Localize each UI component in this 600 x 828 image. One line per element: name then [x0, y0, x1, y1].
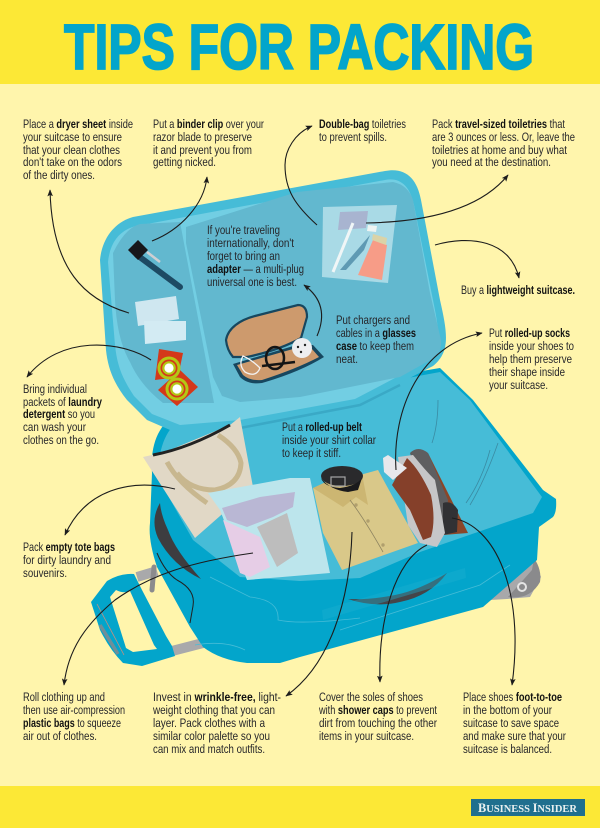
text: dryer sheet tip: your suitcase to ensure — [23, 130, 122, 144]
text: glasses case tip: cables in a glasses — [336, 326, 416, 340]
arrow: lightweight suitcase — [435, 241, 519, 278]
text: foot-to-toe tip: and make sure that your — [463, 729, 566, 743]
text: rolled-up belt tip: Put a rolled-up belt — [282, 420, 362, 434]
text: double-bag tip: Double-bag toiletries — [319, 117, 406, 131]
icon: toiletries in plastic bag — [322, 205, 397, 283]
text: travel-sized toiletries tip: you need at the destination. — [432, 155, 551, 169]
text: laundry detergent tip: packets of laundry — [23, 395, 102, 409]
arrow: dryer sheet — [50, 190, 129, 313]
text: adapter tip: adapter — a multi-plug — [207, 262, 304, 276]
text: adapter tip: internationally, don't — [207, 236, 294, 250]
text: adapter tip — [207, 223, 304, 289]
text: glasses case tip: case to keep them — [336, 339, 414, 353]
arrow: rolled-up socks — [396, 333, 482, 470]
logo: Business Insider: BUSINESS INSIDER — [478, 800, 578, 815]
text: plastic bags tip — [23, 690, 125, 743]
text: plastic bags tip: then use air-compression — [23, 703, 125, 717]
text: wrinkle-free tip: layer. Pack clothes with a — [153, 716, 265, 730]
suitcase luggage handle — [91, 567, 203, 666]
text: dryer sheet tip: Place a dryer sheet inside — [23, 117, 133, 131]
text: binder clip tip — [153, 117, 264, 169]
icon: dryer sheets — [135, 296, 186, 344]
arrow: laundry detergent — [27, 345, 151, 377]
text: foot-to-toe tip: in the bottom of your — [463, 703, 552, 717]
title band — [0, 0, 600, 84]
arrow: foot-to-toe — [452, 518, 515, 685]
text: foot-to-toe tip: suitcase is balanced. — [463, 742, 552, 756]
arrow: binder clip — [152, 177, 207, 241]
arrow: plastic bags — [64, 553, 253, 685]
text: plastic bags tip: plastic bags to squeeze — [23, 716, 121, 730]
text: double-bag tip — [319, 117, 406, 144]
text: tote bags tip — [23, 540, 115, 580]
text: travel-sized toiletries tip: toiletries at home and buy what — [432, 143, 567, 157]
text: wrinkle-free tip: similar color palette so you — [153, 729, 270, 743]
lid left compartment — [113, 222, 214, 403]
icon: glasses case with chargers — [226, 305, 324, 383]
text: binder clip tip: it and prevent you from — [153, 143, 252, 157]
text: dryer sheet tip — [23, 117, 133, 182]
text: foot-to-toe tip — [463, 690, 566, 756]
text: binder clip tip: Put a binder clip over your — [153, 117, 264, 131]
text: rolled-up belt tip: inside your shirt collar — [282, 433, 376, 447]
text: travel-sized toiletries tip: Pack travel-sized toiletries that — [432, 117, 565, 131]
text: tote bags tip: for dirty laundry and — [23, 553, 111, 567]
suitcase lid — [100, 170, 446, 433]
text: shower caps tip: with shower caps to prevent — [318, 703, 437, 717]
text: dryer sheet tip: of the dirty ones. — [23, 168, 95, 182]
text: rolled-up socks tip: inside your shoes to — [489, 339, 574, 353]
text: rolled-up belt tip — [282, 420, 376, 460]
text: laundry detergent tip: detergent so you — [23, 407, 95, 421]
text: shower caps tip: items in your suitcase. — [319, 729, 414, 743]
arrow: tote bags — [65, 485, 175, 535]
text: shower caps tip: Cover the soles of shoes — [319, 690, 423, 704]
text: wrinkle-free tip: can mix and match outfits. — [153, 742, 265, 756]
text: double-bag tip: to prevent spills. — [319, 130, 387, 144]
icon: shoes with shower caps and socks — [383, 449, 468, 547]
icon: empty tote bag — [143, 417, 253, 538]
suitcase interior — [158, 372, 542, 581]
text: laundry detergent tip: can wash your — [23, 420, 86, 434]
text: wrinkle-free tip: weight clothing that you can — [152, 703, 275, 717]
arrow: wrinkle-free clothing — [286, 532, 352, 696]
icon: compression bag with clothes — [208, 478, 330, 580]
text: wrinkle-free tip — [152, 690, 281, 756]
text: adapter tip: forget to bring an — [207, 249, 280, 263]
text: foot-to-toe tip: suitcase to save space — [463, 716, 559, 730]
text: rolled-up socks tip: your suitcase. — [489, 378, 548, 392]
text: rolled-up socks tip: their shape inside — [489, 365, 565, 379]
text: glasses case tip — [336, 313, 416, 366]
text: dryer sheet tip: don't take on the odors — [23, 155, 122, 169]
text: shower caps tip: dirt from touching the other — [319, 716, 437, 730]
text: binder clip tip: razor blade to preserve — [153, 130, 252, 144]
footer band — [0, 786, 600, 828]
icon: razor with binder clip — [128, 240, 180, 287]
strap and wrinkle lines — [154, 503, 201, 579]
text: rolled-up socks tip: Put rolled-up socks — [489, 326, 570, 340]
text: plastic bags tip: Roll clothing up and — [23, 690, 105, 704]
icon: shirt with rolled-up belt — [313, 466, 418, 570]
icon: laundry detergent packets — [155, 349, 198, 406]
arrow: travel-sized toiletries — [366, 175, 508, 223]
arrow: glasses case — [304, 285, 322, 336]
text: shower caps tip — [318, 690, 437, 743]
text: laundry detergent tip: clothes on the go. — [23, 433, 99, 447]
arrow: shower caps — [380, 545, 427, 682]
text: tote bags tip: souvenirs. — [23, 566, 67, 580]
arrow: double-bag — [285, 126, 317, 225]
suitcase body — [150, 368, 556, 663]
text: tote bags tip: Pack empty tote bags — [23, 540, 115, 554]
lid right compartment — [186, 182, 441, 402]
text: glasses case tip: neat. — [336, 352, 358, 366]
suitcase wheel — [490, 557, 541, 600]
text: binder clip tip: getting nicked. — [153, 155, 216, 169]
text: plastic bags tip: air out of clothes. — [23, 729, 97, 743]
text: adapter tip: If you're traveling — [207, 223, 280, 237]
text: rolled-up belt tip: to keep it stiff. — [282, 446, 341, 460]
text: rolled-up socks tip: help them preserve — [489, 352, 572, 366]
text: adapter tip: universal one is best. — [207, 275, 297, 289]
text: laundry detergent tip: Bring individual — [23, 382, 87, 396]
text: glasses case tip: Put chargers and — [336, 313, 410, 327]
text: laundry detergent tip — [23, 382, 102, 447]
text: dryer sheet tip: that your clean clothes — [23, 143, 120, 157]
text: wrinkle-free tip: Invest in wrinkle-free, light- — [153, 690, 281, 704]
text: foot-to-toe tip: Place shoes foot-to-toe — [463, 690, 562, 704]
text: rolled-up socks tip — [489, 326, 574, 392]
text: travel-sized toiletries tip — [432, 117, 575, 169]
